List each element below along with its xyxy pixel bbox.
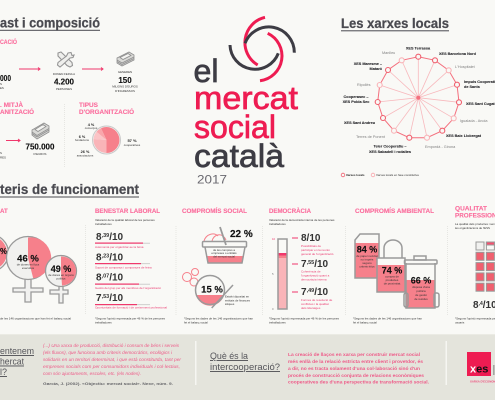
score: 7,55/10: /10 (314, 259, 329, 270)
panel: les xarxes locals (341, 15, 495, 177)
footnote (184, 316, 253, 324)
thermometer gauge: 5 (272, 272, 274, 276)
subheading: tipus d'organitzacio (79, 102, 134, 116)
icon: padlock 74 %: de proximitat (384, 282, 400, 286)
network labels: Teler Cooperatiu – (373, 144, 407, 148)
stat: 750.000 (26, 142, 55, 156)
footnote (353, 316, 422, 324)
footer definition: a dir, no es tracta solament d'una col·laboració sinó d'un (288, 366, 420, 371)
pie labels: comerços (85, 126, 98, 130)
stat: 750.000: 750.000 (26, 142, 55, 152)
stat: 15 %: 15 % (201, 284, 223, 296)
subheading: BENESTAR LABORAL (95, 208, 160, 215)
logo: el mercat social catala (194, 17, 298, 186)
footer definition: La creació de llaços en xarxa per construir mercat social (288, 352, 420, 357)
score: 8/10 (292, 233, 334, 256)
network labels: Terres de Ponent (356, 135, 386, 139)
stat: 22 %: 22 % (230, 229, 253, 240)
pie labels: cooperatives (124, 143, 141, 147)
score: 7,55/10: Coherència de (301, 270, 321, 274)
panel: equitat (0, 208, 76, 320)
icon: paper 84 %: 84 % (357, 244, 377, 254)
footer quote (43, 343, 182, 376)
panel: benestar laboral (95, 208, 167, 324)
icon: recycling bin 66 %: disposa d'una (412, 285, 430, 289)
footer quote: empreses socials com per consumidors individuals i col·lectius, (43, 364, 180, 369)
female symbol: 46 %: de dones en llocs (17, 262, 40, 266)
icon: recycling bin 66 %: política (416, 289, 426, 293)
panel: compromis ambiental (353, 207, 439, 324)
icon: paper 84 % (355, 234, 379, 278)
score: autonomia: Autonomia per organitzar-se la feina (95, 245, 144, 249)
network labels: Manlleu (382, 51, 395, 55)
network labels: XES Baix Llobregat (446, 134, 482, 138)
footnote (269, 316, 340, 324)
footnote: usuaris (455, 320, 465, 324)
subheading: COMPROMÍS AMBIENTAL (355, 207, 434, 215)
footer question: mercat social (0, 346, 34, 378)
score: 7,49/10: 7 (301, 287, 307, 298)
network labels: Ripollès (357, 83, 371, 87)
score: 8/10: Possibilitats de (301, 244, 321, 248)
wordmark: el (194, 53, 218, 89)
subheading: tipus d'organitzacio: TIPUS (79, 102, 98, 109)
footnote: fet el balanç social (184, 320, 208, 324)
network labels: XES Sabadell i rodalies (369, 150, 411, 154)
score: 7,55/10 (292, 259, 330, 282)
wordmark: mercat (194, 80, 298, 116)
footnote: treballadores (95, 320, 112, 324)
grid chart (476, 242, 494, 291)
score: gestio: 8 (96, 272, 102, 284)
thermometer gauge: 10 (272, 237, 276, 241)
score: formacio: /10 (109, 293, 124, 304)
basket caption: del mercat social (213, 254, 235, 258)
footer quote: (...) Una xarxa de producció, distribució i consum de béns i serveis (43, 343, 180, 348)
radial network chart (375, 54, 462, 140)
footer question: mercat social: l? (0, 367, 7, 378)
small label: S (0, 151, 2, 155)
basket caption: empreses o entitats (211, 251, 237, 255)
score: formacio (95, 293, 167, 310)
icon: bubbles (182, 268, 198, 286)
score: 8/10: participar en la reunió (301, 248, 330, 252)
footer band (0, 334, 495, 400)
description (455, 222, 495, 230)
score: 7,49/10: dels lideratges (301, 306, 321, 310)
score: 7,49/10: /10 (314, 287, 329, 298)
pie labels (75, 123, 141, 158)
thermometer gauge: 0 (272, 307, 274, 311)
arrow (6, 139, 20, 142)
stat: persones: 4.200 (54, 78, 75, 86)
network labels: Cooperasec – (344, 95, 368, 99)
footnote: *Segons les dades de les 146 organitzacions que han (353, 316, 422, 320)
arrow (19, 68, 40, 70)
network labels: XES Barcelona Nord (439, 52, 477, 56)
score: 7,49/10: conflictes i la qualitat (301, 302, 329, 306)
score: autonomia: 8 (96, 232, 102, 243)
pie labels: associacions (77, 154, 94, 158)
icon: padlock 74 %: productes (386, 278, 399, 282)
pie labels: 57 % (127, 138, 137, 143)
icon: padlock 74 %: 74 % (382, 266, 402, 276)
pie labels: 4 % (88, 123, 95, 127)
icon: recycling bin 66 % (404, 256, 439, 308)
legend (341, 173, 419, 177)
wordmark (194, 53, 298, 186)
score: gestio: ,07 (102, 274, 109, 280)
icon: piggy gauge (196, 276, 233, 308)
score: suport: Suport de companys i companyes de feina (95, 266, 152, 270)
icon: banknotes (117, 52, 134, 66)
score: autonomia (95, 232, 150, 249)
score: 7,55/10: ,55 (307, 260, 314, 266)
score: 7,49/10: ,49 (307, 288, 314, 294)
female symbol: 49 %: de dones en òrgans (48, 273, 74, 277)
panel: compromis social (182, 207, 253, 324)
score: autonomia: /10 (109, 232, 124, 243)
legend: Xarxes locals en fase constitutiva (376, 173, 419, 177)
network labels: XES Sant Andreu (344, 121, 376, 125)
score: formacio: Oportunitats de formació i de creixement professional (95, 306, 167, 310)
subheading: AT (0, 208, 8, 215)
description: les organitzacions de l'ESS (455, 226, 490, 230)
stat: ingressos: MILIONS D'EUROS (112, 84, 138, 88)
score: 7,55/10: l'organització quant a (301, 274, 330, 278)
thermometer gauge (272, 237, 287, 311)
score: 7,55/10: democràcia interna (301, 278, 327, 282)
network labels: XES Sant Cugat (466, 102, 495, 106)
icon: recycling bin 66 %: 66 % (411, 276, 431, 286)
pie chart: tipus (92, 126, 120, 154)
footer definition: procés de construcció conjunta de relacions econòmiques (288, 373, 424, 378)
female symbol: 46 %: executius (22, 266, 35, 270)
network labels: XES Pobla Sec (343, 100, 369, 104)
description: treballadores (95, 222, 112, 226)
network labels: Mataró (370, 67, 383, 71)
score: gestio: Gestió del grup per als membres de l'organització (95, 286, 161, 290)
logo: xes (467, 352, 495, 384)
network labels: Igualada - Anoia (460, 119, 488, 123)
stat: left total: ES (0, 86, 4, 90)
subheading: tipus d'organitzacio: D'ORGANITZACIÓ (79, 108, 134, 116)
heading: criteris de funcionament: teris de funcionament (0, 181, 139, 197)
basket caption: de les compres a (213, 248, 235, 252)
icon: banknotes (32, 123, 49, 139)
subheading: COMPROMÍS SOCIAL (182, 207, 247, 215)
subheading: dimensio: CACIÓ (0, 38, 17, 46)
stat: left total: S (0, 82, 2, 86)
footer quote: solidaris en un territori determinat, i que està constituïda, tant per (43, 357, 182, 362)
icon: recycling bin 66 %: de gestió (415, 293, 427, 297)
description: Valoració de la qualitat laboral de les persones (95, 218, 155, 222)
footnote (455, 316, 495, 324)
score: gestio (95, 272, 161, 290)
icon: paper 84 %: de paper reciclat (356, 254, 378, 258)
subheading (455, 206, 495, 220)
heading: abast i composicio: ast i composició (0, 14, 100, 30)
footnote: fet el balanç social (353, 320, 377, 324)
subheading: DEMOCRÀCIA (269, 208, 312, 215)
footer question: intercooperacio (210, 351, 280, 373)
score: gestio: /10 (109, 272, 124, 284)
stat: left total (0, 74, 11, 90)
network labels: de Sants (464, 85, 480, 89)
footnote: de les 146 organitzacions que han fet el balanç social (0, 316, 71, 320)
panel: democracia (269, 208, 340, 324)
score: 7,49/10 (292, 287, 333, 310)
pie labels: 6 % (79, 135, 86, 139)
subheading: QUALITAT (455, 206, 487, 212)
score: 8/10: 8/10 (301, 233, 321, 244)
heading: Les xarxes locals (341, 15, 449, 31)
score: ,4 (479, 301, 483, 307)
icon: paper 84 %: criteris ètics (359, 264, 375, 268)
panel: qualitat professional (455, 206, 495, 324)
score: suport (95, 252, 152, 270)
stat: left total: 000 (0, 74, 11, 83)
basket caption (211, 248, 237, 258)
footer question: intercooperacio: intercooperació? (210, 362, 280, 373)
female symbol: 49 %: 49 % (51, 264, 71, 274)
logo: xes: xes (470, 364, 488, 376)
pie labels: fundacions (75, 138, 90, 142)
caption: entitats de finances (225, 298, 250, 302)
female symbol: 49 % (46, 256, 76, 303)
footer question: mercat social: entenem (0, 346, 34, 357)
footer question: intercooperacio: Què és la (210, 351, 249, 362)
score: suport: /10 (109, 252, 124, 264)
footnote: *Segons l'opinió expressada per 46 % de les persones (95, 316, 166, 320)
description (95, 218, 155, 226)
icon: paper 84 %: no imprès (361, 258, 374, 262)
subheading: mida mitja: . MITJÀ (0, 102, 24, 109)
panel: abast i composicio (0, 14, 141, 167)
wordmark: 2017 (197, 172, 227, 186)
female symbol: 46 %: 46 % (17, 254, 39, 264)
icon: basket (202, 227, 246, 263)
wordmark: català (194, 138, 284, 174)
icon: interlocking rings (230, 17, 294, 81)
stat: ingressos: D'INGRESSOS (115, 89, 135, 93)
description: treballadores (269, 222, 286, 226)
subheading: mida mitja: ANITZACIÓ (0, 108, 34, 116)
footnote: *Segons l'opinió expressada per 46 % de les persones (269, 316, 340, 320)
icon: padlock 74 %: compra de (385, 274, 399, 278)
score: 8/10: general de l'organització (301, 252, 334, 256)
stat: persones: PERSONES (56, 87, 72, 91)
network labels: L'Hospitalet (455, 65, 476, 69)
description (269, 218, 335, 226)
quote attribution: García, J. (2002). «Objectiu: mercat social». Nexe, núm. 9. (43, 381, 173, 386)
footer definition: més enllà de la relació estricta entre client i proveïdor, és (288, 359, 423, 364)
subheading: mida mitja (0, 102, 34, 116)
description: Valoració de la democràcia interna de les persones (269, 218, 335, 222)
small label: RES (0, 156, 6, 160)
stat: 750.000: D'EUROS (34, 152, 47, 156)
score: 8 (473, 300, 479, 311)
legend: Xarxes locals (346, 173, 365, 177)
icon: paper 84 %: segons (362, 261, 372, 265)
score: formacio: ,53 (102, 294, 109, 300)
footnote: treballadores (269, 320, 286, 324)
caption: ètiques (225, 302, 235, 306)
footer quote: (els fluxos), que funciona amb criteris democràtics, ecològics i (43, 350, 173, 355)
wordmark: social (194, 109, 276, 145)
network labels (343, 46, 495, 154)
score: 7,49/10: Formes de resolució de (301, 298, 333, 302)
icon: padlock 74 % (377, 240, 405, 292)
stat: ingressos (112, 70, 138, 93)
footer definition (288, 352, 429, 384)
score: autonomia: ,39 (102, 233, 109, 239)
footer quote: com són ajuntaments, escoles, etc. (els nodes). (43, 371, 141, 376)
stat: persones (53, 72, 75, 91)
score: suport: 8 (96, 252, 102, 264)
footer question: mercat social: hercat (0, 356, 24, 368)
network labels: XES Maresme – (354, 62, 382, 66)
arrow (82, 68, 103, 70)
footer definition: cooperatives des d'una perspectiva de transformació social. (288, 380, 429, 384)
icon: recycling bin 66 %: de residus (414, 297, 428, 301)
stat: ingressos: 150 (118, 76, 132, 85)
female symbol: 46 % (6, 236, 51, 302)
footnote (95, 316, 166, 324)
icon: tools (58, 52, 74, 67)
female symbol: left: % (0, 247, 7, 256)
score: 7,55/10: 7 (301, 259, 307, 270)
footnote: *Segons les dades de les 146 organitzacions que han (184, 316, 253, 320)
network labels: Empordà - Girona (425, 145, 456, 149)
caption: Estalvi dipositat en (225, 294, 249, 298)
small label (0, 151, 6, 160)
stat: persones: DONEN FEINA A (53, 72, 75, 76)
stat: ingressos: GENEREN (118, 70, 132, 74)
female symbol: 49 %: polítics (56, 276, 66, 280)
pie labels: 26 % (81, 150, 90, 154)
caption (225, 294, 250, 306)
score: suport: ,23 (102, 254, 109, 260)
score: formacio: 7 (96, 293, 102, 304)
network labels: XES Terrassa (406, 46, 431, 50)
